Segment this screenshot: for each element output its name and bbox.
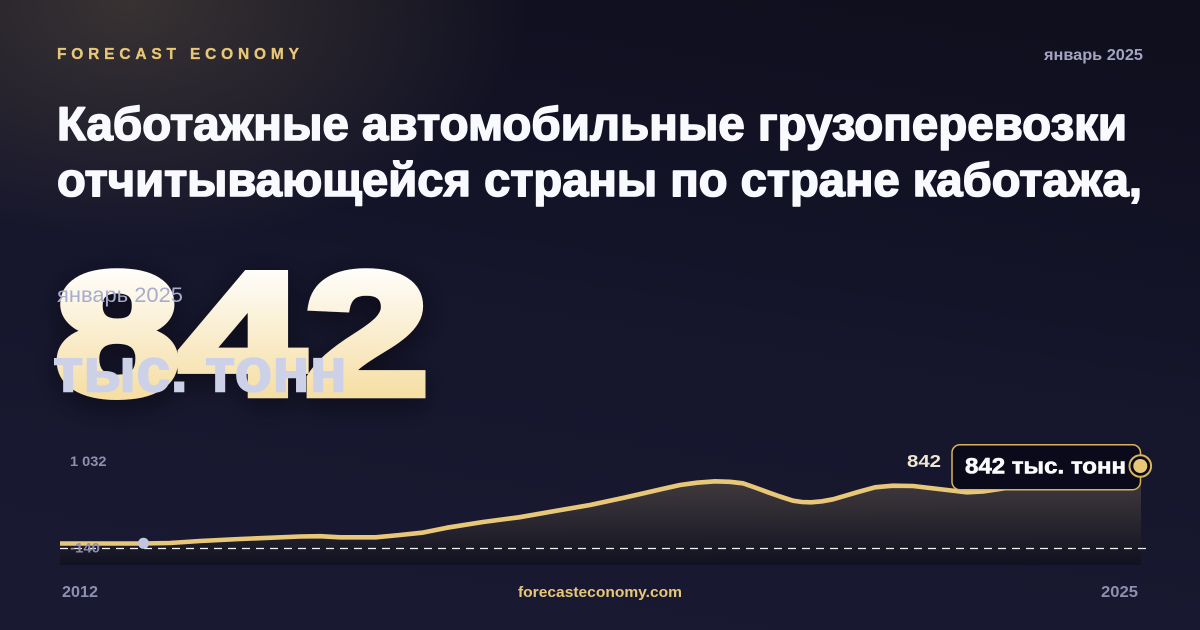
callout: 842 тыс. тонн [965,454,1126,478]
minimum point [138,538,149,549]
previous value label: 842 [907,451,941,471]
source: forecasteconomy.com [518,584,682,601]
zero dashed line [60,548,1147,550]
big number: 842 [55,236,429,431]
line chart [60,466,1147,565]
x axis start year: 2012 [62,584,98,601]
x axis end year: 2025 [1101,584,1138,601]
title: отчитывающейся страны по стране каботажа, [57,153,1142,206]
chart area fill [60,466,1141,565]
title: Каботажные автомобильные грузоперевозки [57,97,1127,150]
unit label: тыс. тонн [53,336,347,406]
callout [952,445,1140,490]
last point marker [1130,455,1151,477]
axis max label: 1 032 [70,453,107,469]
chart line [60,466,1141,544]
period label: январь 2025 [57,284,183,307]
axis min label: -140 [70,540,100,556]
date top right: январь 2025 [1044,47,1143,64]
title [57,97,1142,206]
brand label: FORECAST ECONOMY [57,46,300,63]
